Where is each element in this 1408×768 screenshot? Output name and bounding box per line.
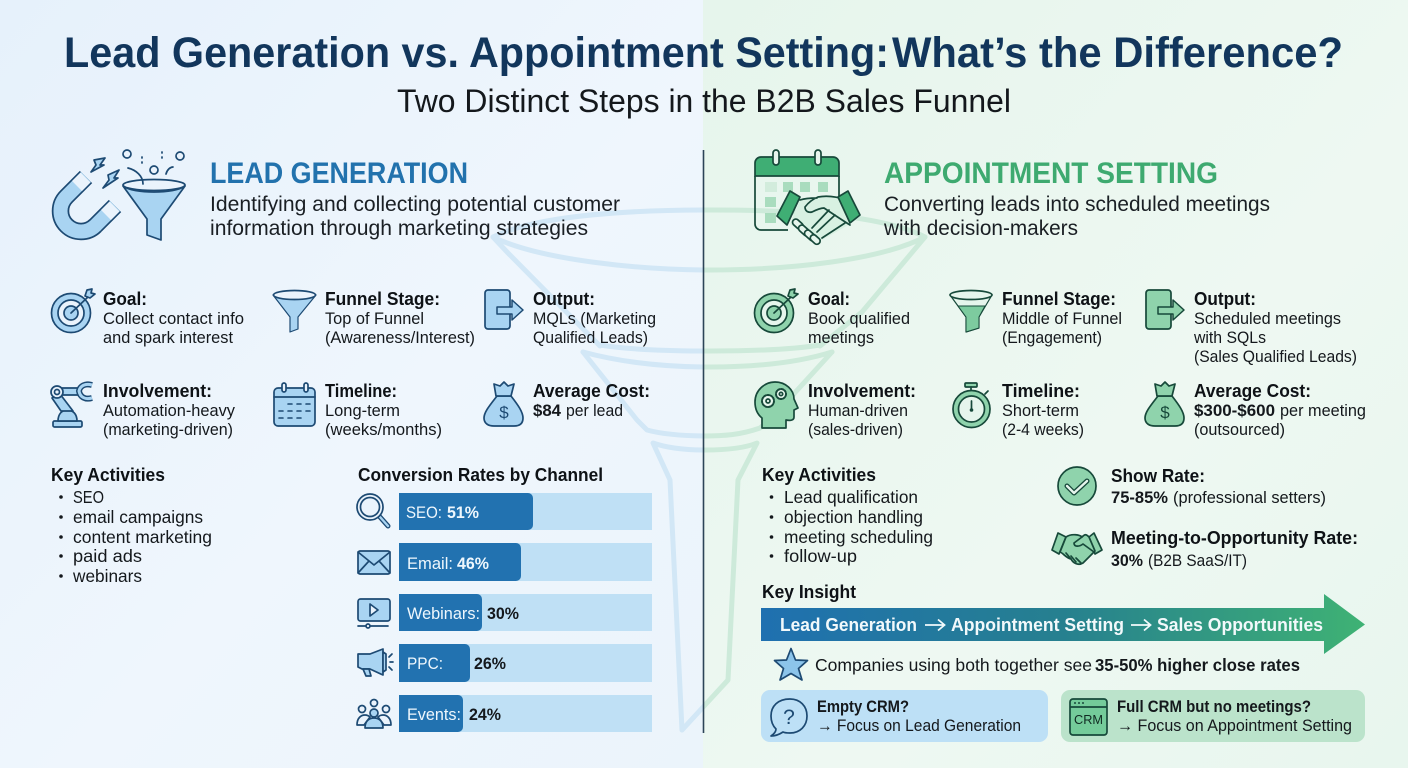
timeline: lead generation <box>325 381 442 439</box>
funnel stage: appointment setting: (Engagement) <box>1002 329 1102 347</box>
callout: full CRM <box>1061 690 1365 742</box>
bar: Webinars <box>399 594 652 631</box>
description: lead generation <box>210 193 620 240</box>
involvement: lead generation: (marketing-driven) <box>103 421 233 439</box>
description: appointment setting: with decision-makers <box>883 217 1078 240</box>
watermark funnel: right half <box>704 208 928 710</box>
right background panel <box>703 0 1408 768</box>
goal: lead generation: Goal: <box>103 289 147 309</box>
description: appointment setting <box>883 193 1270 240</box>
icon: people <box>357 700 391 728</box>
involvement: lead generation: Involvement: <box>103 381 212 401</box>
key activities: appointment setting: Lead qualification <box>784 487 918 507</box>
bar: SEO <box>399 493 652 530</box>
key activities: lead generation <box>51 465 212 586</box>
bar: Email <box>399 543 652 581</box>
output: appointment setting: Output: <box>1194 289 1256 309</box>
bar: Webinars: 30% <box>487 605 519 623</box>
involvement: appointment setting: Involvement: <box>808 381 916 401</box>
heading: lead generation: LEAD GENERATION <box>210 157 468 190</box>
average cost: appointment setting: $300-$600 <box>1194 402 1275 420</box>
average cost: lead generation: per lead <box>566 402 623 420</box>
meeting-to-opportunity rate: (B2B SaaS/IT) <box>1148 552 1247 570</box>
left background panel <box>0 0 703 768</box>
key activities: lead generation: paid ads <box>73 546 142 566</box>
icon: handshake <box>1052 533 1102 564</box>
meeting-to-opportunity rate <box>1111 528 1358 570</box>
heading: key insight: Key Insight <box>762 582 856 602</box>
involvement: appointment setting: (sales-driven) <box>808 421 903 439</box>
output: lead generation: Output: <box>533 289 595 309</box>
description: appointment setting: Converting leads into scheduled meetings <box>884 193 1270 216</box>
goal: lead generation <box>103 289 244 347</box>
output: appointment setting: (Sales Qualified Leads) <box>1194 348 1357 366</box>
icon: money bag right: $ <box>1160 403 1170 422</box>
goal: appointment setting <box>808 289 910 347</box>
icon: money bag right <box>1145 382 1184 426</box>
involvement: appointment setting: Human-driven <box>808 402 908 420</box>
callout: empty CRM: Empty CRM? <box>817 698 909 716</box>
bar: PPC: 26% <box>474 655 506 673</box>
key activities: lead generation: webinars <box>72 566 142 586</box>
key activities: appointment setting: Key Activities <box>762 465 876 485</box>
funnel stage: appointment setting: Funnel Stage: <box>1002 289 1116 309</box>
icon: robot arm <box>51 384 92 427</box>
funnel stage: lead generation <box>325 289 475 347</box>
timeline: lead generation: Long-term <box>325 402 400 420</box>
output: lead generation <box>533 289 656 347</box>
funnel stage: appointment setting: Middle of Funnel <box>1002 310 1122 328</box>
bar: Email: 46% <box>457 555 489 573</box>
average cost: appointment setting: per meeting <box>1280 402 1366 420</box>
icon: envelope <box>358 551 390 574</box>
average cost: lead generation: $84 <box>533 402 562 420</box>
icon: output left <box>485 290 523 329</box>
timeline: appointment setting <box>1002 381 1084 439</box>
average cost: lead generation <box>533 381 650 420</box>
show rate: (professional setters) <box>1173 489 1326 507</box>
callout: close rates: 35-50% higher close rates <box>1095 655 1300 675</box>
bar: SEO: SEO: <box>406 504 442 522</box>
arrow: lead generation to sales opportunities: Appointment Setting <box>951 615 1124 635</box>
icon: money bag left: $ <box>499 403 509 422</box>
timeline: appointment setting: Timeline: <box>1002 381 1080 401</box>
funnel stage: lead generation: Funnel Stage: <box>325 289 440 309</box>
callout: full CRM: Full CRM but no meetings? <box>1117 698 1311 716</box>
title <box>64 29 1343 77</box>
timeline: lead generation: (weeks/months) <box>325 421 442 439</box>
arrow: lead generation to sales opportunities: Sales Opportunities <box>1157 615 1323 635</box>
callout: full CRM: → Focus on Appointment Setting <box>1117 717 1352 735</box>
callout: empty CRM: → Focus on Lead Generation <box>817 717 1021 735</box>
bar: SEO: 51% <box>447 504 479 522</box>
meeting-to-opportunity rate: Meeting-to-Opportunity Rate: <box>1111 528 1358 548</box>
show rate: 75-85% <box>1111 489 1168 507</box>
timeline: lead generation: Timeline: <box>325 381 397 401</box>
icon: head with gears <box>755 382 798 428</box>
key activities: appointment setting <box>762 465 933 566</box>
funnel stage: lead generation: Top of Funnel <box>325 310 424 328</box>
bar: PPC <box>399 644 652 682</box>
key activities: lead generation: Key Activities <box>51 465 165 485</box>
arrow: lead generation to sales opportunities <box>761 594 1365 654</box>
description: lead generation: information through marketing strategies <box>210 217 588 240</box>
watermark funnel: left half <box>490 208 703 732</box>
arrow: lead generation to sales opportunities: Lead Generation <box>780 615 917 635</box>
key activities: lead generation: SEO <box>73 487 104 507</box>
icon: output right <box>1146 290 1184 329</box>
average cost: appointment setting: Average Cost: <box>1194 381 1311 401</box>
heading: appointment setting: APPOINTMENT SETTING <box>884 157 1218 190</box>
funnel stage: appointment setting <box>1002 289 1122 347</box>
bar: Events: 24% <box>469 706 501 724</box>
output: lead generation: MQLs (Marketing <box>533 310 656 328</box>
timeline: appointment setting: Short-term <box>1002 402 1079 420</box>
goal: appointment setting: Goal: <box>808 289 850 309</box>
involvement: lead generation <box>103 381 236 439</box>
icon: funnel right <box>950 290 992 332</box>
goal: lead generation: and spark interest <box>103 329 233 347</box>
subtitle: Two Distinct Steps in the B2B Sales Funnel <box>397 83 1011 119</box>
output: appointment setting <box>1193 289 1357 366</box>
goal: lead generation: Collect contact info <box>103 310 244 328</box>
bar: Email: Email: <box>407 555 453 573</box>
icon: magnet and funnel <box>61 150 185 240</box>
icon: funnel left <box>273 290 316 332</box>
title: Lead Generation vs. Appointment Setting: <box>64 29 889 77</box>
callout: empty CRM <box>761 690 1048 742</box>
average cost: lead generation: Average Cost: <box>533 381 650 401</box>
icon: money bag left <box>484 382 523 426</box>
involvement: lead generation: Automation-heavy <box>103 402 236 420</box>
show rate <box>1111 466 1326 507</box>
goal: appointment setting: meetings <box>808 329 874 347</box>
icon: stopwatch <box>953 383 990 428</box>
icon: check circle <box>1058 467 1096 505</box>
output: appointment setting: with SQLs <box>1193 329 1266 347</box>
key activities: appointment setting: meeting scheduling <box>784 527 933 547</box>
funnel stage: lead generation: (Awareness/Interest) <box>325 329 475 347</box>
average cost: appointment setting: (outsourced) <box>1194 421 1285 439</box>
icon: megaphone <box>358 649 393 676</box>
title: What’s the Difference? <box>892 29 1343 77</box>
key activities: appointment setting: follow-up <box>784 546 857 566</box>
icon: video player <box>358 599 390 628</box>
callout: close rates <box>815 655 1300 675</box>
meeting-to-opportunity rate: 30% <box>1111 552 1143 570</box>
bar: PPC: PPC: <box>407 655 443 673</box>
key activities: lead generation: content marketing <box>73 527 212 547</box>
output: appointment setting: Scheduled meetings <box>1194 310 1341 328</box>
description: lead generation: Identifying and collecting potential customer <box>210 193 620 216</box>
show rate: Show Rate: <box>1111 466 1205 486</box>
callout: empty CRM: ? <box>783 706 795 729</box>
involvement: appointment setting <box>808 381 916 439</box>
icon: star <box>774 648 808 680</box>
key activities: lead generation: email campaigns <box>73 507 203 527</box>
key activities: appointment setting: objection handling <box>784 507 923 527</box>
icon: magnifier <box>357 494 388 526</box>
icon: calendar left <box>274 383 315 426</box>
center divider <box>702 150 704 733</box>
icon: target right <box>754 289 798 332</box>
icon: target left <box>52 289 95 332</box>
icon: calendar with handshake <box>755 150 860 246</box>
goal: appointment setting: Book qualified <box>808 310 910 328</box>
timeline: appointment setting: (2-4 weeks) <box>1002 421 1084 439</box>
callout: close rates: Companies using both together see <box>815 655 1092 675</box>
heading: conversion rates: Conversion Rates by Channel <box>358 465 603 485</box>
bar: Webinars: Webinars: <box>407 605 480 623</box>
bar: Events <box>399 695 652 732</box>
callout: full CRM: CRM <box>1074 713 1103 727</box>
output: lead generation: Qualified Leads) <box>533 329 648 347</box>
average cost: appointment setting <box>1194 381 1366 439</box>
bar: Events: Events: <box>407 706 461 724</box>
